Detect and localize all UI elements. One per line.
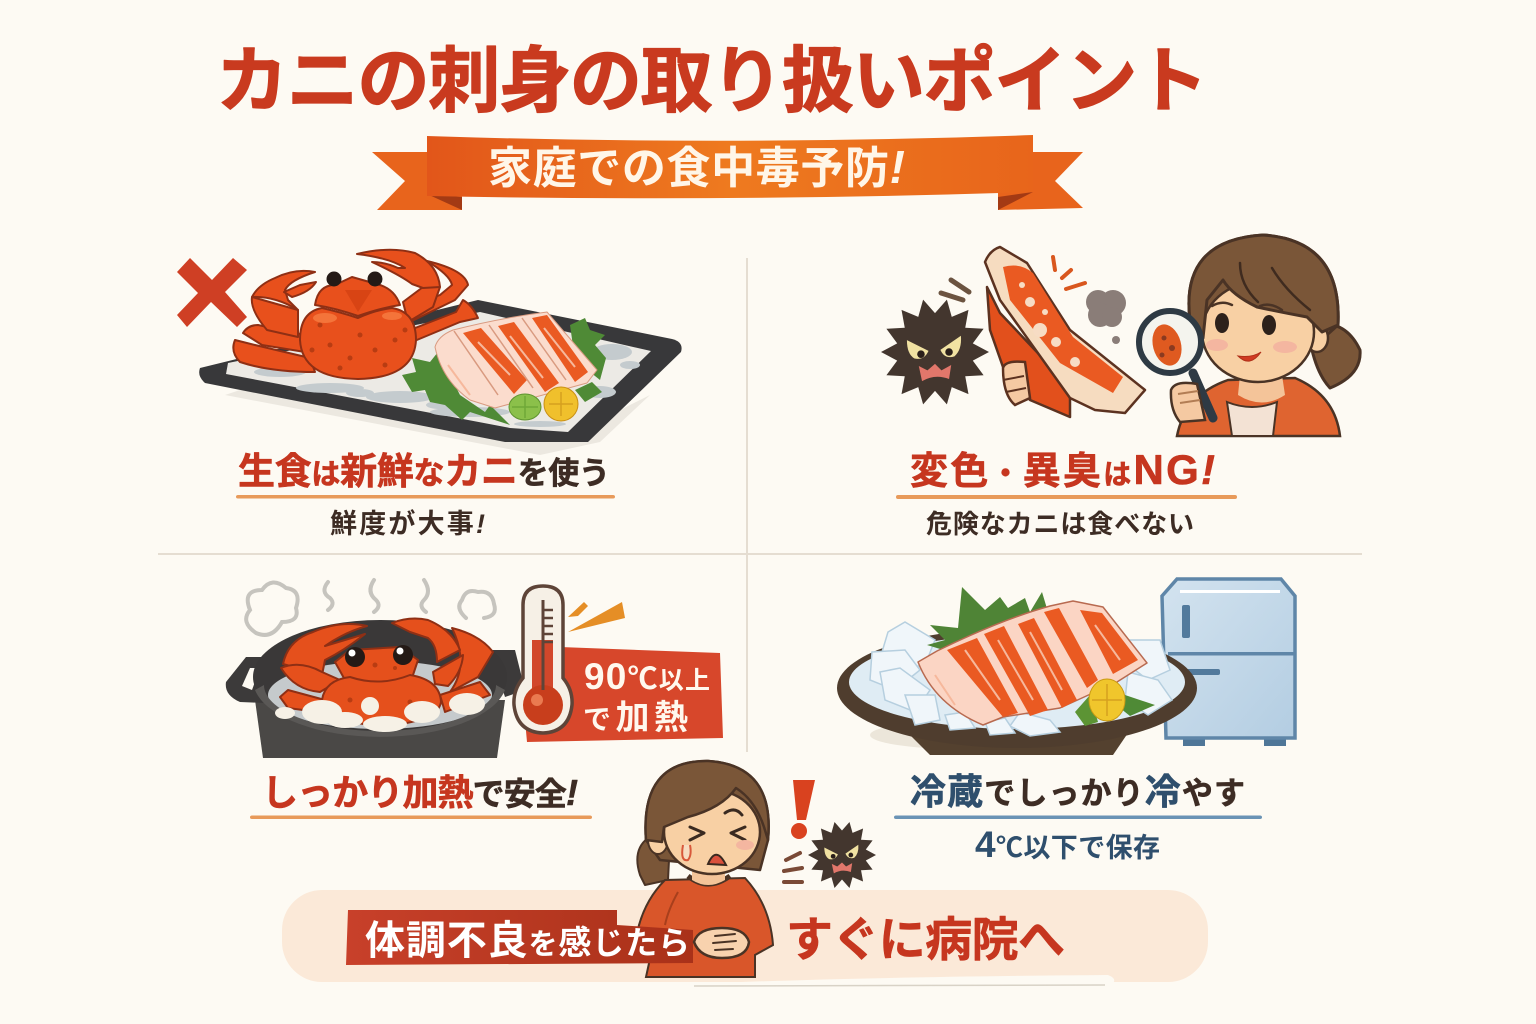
panel: chilled storage — [837, 579, 1295, 865]
icon: germ — [881, 300, 989, 404]
illustration: sashimi slices — [435, 312, 597, 408]
illustration: unwell girl — [635, 761, 773, 977]
banner background — [282, 890, 1208, 982]
illustration: green garnish — [402, 318, 606, 425]
title: カニの刺身の取り扱いポイント — [216, 42, 1208, 122]
icon: small germ — [808, 822, 876, 888]
panel: thorough heating — [226, 580, 625, 758]
heading: heat thoroughly: しっかり加熱で安全! — [262, 772, 578, 813]
illustration: shiso leaves — [927, 587, 1048, 655]
underline — [250, 816, 592, 819]
icon: odor rays — [1053, 257, 1085, 289]
panel: raw fresh crab — [177, 250, 682, 539]
brush stroke — [693, 975, 1114, 986]
icon: shock dashes — [784, 853, 802, 882]
illustration: pot — [226, 620, 525, 758]
ribbon banner — [372, 135, 1083, 210]
illustration: woman with magnifier — [1139, 235, 1360, 436]
illustration: lime and citrus — [509, 387, 578, 421]
label text: 体調不良を感じたら — [365, 919, 690, 963]
underline — [894, 816, 1262, 819]
icon: refrigerator — [1162, 579, 1295, 746]
icon: odor cloud — [1086, 290, 1126, 344]
grid dividers — [158, 258, 1362, 752]
callout: go to hospital: すぐに病院へ — [786, 913, 1065, 966]
illustration: whole crab — [233, 250, 478, 379]
heading: fresh crab: 生食は新鮮なカニを使う — [238, 451, 610, 492]
callout text: 90℃以上 — [584, 656, 710, 697]
callout: 90 degrees heating — [514, 586, 723, 742]
icon: steam clouds — [246, 580, 495, 635]
subtext: 鮮度が大事! — [330, 508, 485, 539]
icon: clasped hands — [694, 928, 749, 958]
subtext: 4℃以下で保存 — [975, 824, 1160, 865]
icon: heat rays — [568, 602, 625, 632]
icon: warning dashes — [941, 280, 969, 300]
label: if you feel unwell — [346, 910, 693, 965]
thermometer — [514, 586, 572, 733]
illustration: plate — [837, 628, 1197, 755]
icon: exclamation mark — [791, 780, 815, 839]
subtext: 危険なカニは食べない — [926, 509, 1194, 539]
heading: keep chilled: 冷蔵でしっかり冷やす — [910, 771, 1245, 812]
icon: red cross — [177, 258, 247, 327]
illustration: crab leg — [985, 247, 1145, 417]
illustration: sashimi — [918, 601, 1147, 725]
illustration: plate with ice — [199, 300, 682, 455]
panel: discoloration and odor — [881, 235, 1360, 539]
illustration: crushed ice — [870, 622, 1172, 736]
illustration: foam — [275, 693, 485, 732]
illustration: boiled crab — [280, 619, 493, 726]
panel: if unwell see a doctor — [282, 761, 1208, 986]
illustration: citrus and leaves — [1075, 679, 1155, 726]
underline — [896, 495, 1237, 499]
ribbon text: 家庭での食中毒予防! — [488, 141, 905, 193]
heading: discoloration: 変色・異臭はNG! — [910, 446, 1215, 493]
underline — [236, 495, 615, 498]
callout text line 2: で加熱 — [583, 699, 688, 737]
